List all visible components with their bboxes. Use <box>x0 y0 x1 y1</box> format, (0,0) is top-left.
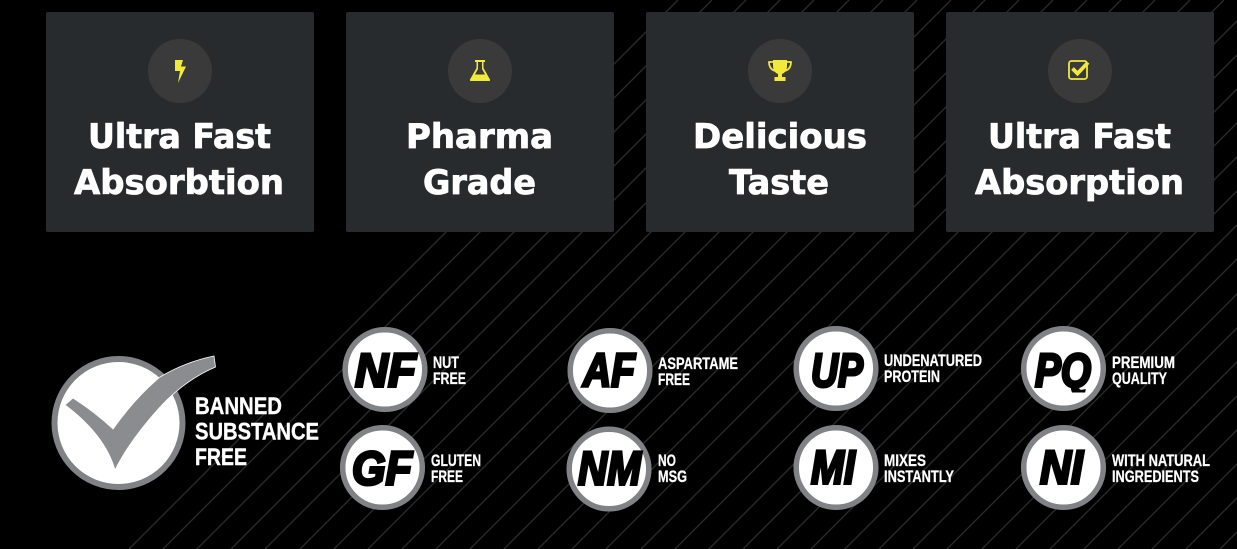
badge: with natural ingredients <box>1024 428 1210 507</box>
badge: nut free: FREE <box>433 369 466 388</box>
heading: pharma grade <box>406 117 553 203</box>
heading: ultra fast absorption <box>975 117 1184 203</box>
panel: delicious taste <box>646 12 914 232</box>
icon: trophy <box>769 60 791 81</box>
badge: aspartame free: AF <box>582 344 636 396</box>
badge: with natural ingredients: NI <box>1040 440 1084 494</box>
badge: mixes instantly: MI <box>811 440 856 494</box>
heading: delicious taste: Delicious <box>693 117 867 157</box>
badge: banned substance free <box>54 356 319 487</box>
badge: no msg: NO <box>658 451 676 470</box>
panel: pharma grade <box>346 12 614 232</box>
badge: undenatured protein: UNDENATURED <box>884 351 982 370</box>
badge: nut free: NF <box>355 344 417 396</box>
icon: lightning bolt <box>175 60 186 83</box>
label: banned substance free: SUBSTANCE <box>195 418 319 446</box>
heading: pharma grade: Grade <box>423 163 536 203</box>
badge: undenatured protein <box>796 329 982 408</box>
panel: ultra fast absorption <box>946 12 1214 232</box>
badge: aspartame free <box>570 331 738 410</box>
icon: check mark in circle <box>54 356 216 487</box>
heading: pharma grade: Pharma <box>406 117 553 157</box>
badge: no msg: MSG <box>658 467 687 486</box>
badge: nut free <box>345 330 466 409</box>
heading: delicious taste: Taste <box>729 163 829 203</box>
badge: undenatured protein: PROTEIN <box>884 367 940 386</box>
badge: mixes instantly: INSTANTLY <box>884 467 954 486</box>
label: banned substance free: BANNED <box>195 393 282 420</box>
badge: premium quality: PQ <box>1035 344 1091 396</box>
badge: premium quality <box>1024 329 1175 408</box>
badge: gluten free <box>343 428 481 507</box>
icon: flask <box>470 60 490 81</box>
badge: aspartame free: FREE <box>658 370 690 389</box>
badge: no msg: NM <box>578 442 642 494</box>
heading: ultra fast absorbtion <box>74 117 284 203</box>
badge: premium quality: PREMIUM <box>1112 353 1175 372</box>
heading: ultra fast absorbtion: Absorbtion <box>74 163 284 203</box>
badge: with natural ingredients: INGREDIENTS <box>1112 467 1199 486</box>
badge: undenatured protein: UP <box>811 344 864 396</box>
heading: ultra fast absorption: Ultra Fast <box>988 117 1171 157</box>
badge: nut free: NUT <box>433 353 459 372</box>
label: banned substance free <box>195 393 319 471</box>
badge: aspartame free: ASPARTAME <box>658 354 738 373</box>
label: banned substance free: FREE <box>195 444 247 471</box>
heading: ultra fast absorption: Absorption <box>975 163 1184 203</box>
badge: gluten free: GF <box>352 442 413 494</box>
panel: ultra fast absorbtion <box>46 12 314 232</box>
badge: mixes instantly <box>796 428 954 507</box>
icon: checked box <box>1069 61 1088 79</box>
badge: mixes instantly: MIXES <box>884 451 926 470</box>
heading: ultra fast absorbtion: Ultra Fast <box>88 117 271 157</box>
badge: no msg <box>569 429 687 509</box>
badge: premium quality: QUALITY <box>1112 369 1167 388</box>
badge: gluten free: FREE <box>431 467 463 486</box>
heading: delicious taste <box>693 117 867 203</box>
badge: gluten free: GLUTEN <box>431 451 481 470</box>
